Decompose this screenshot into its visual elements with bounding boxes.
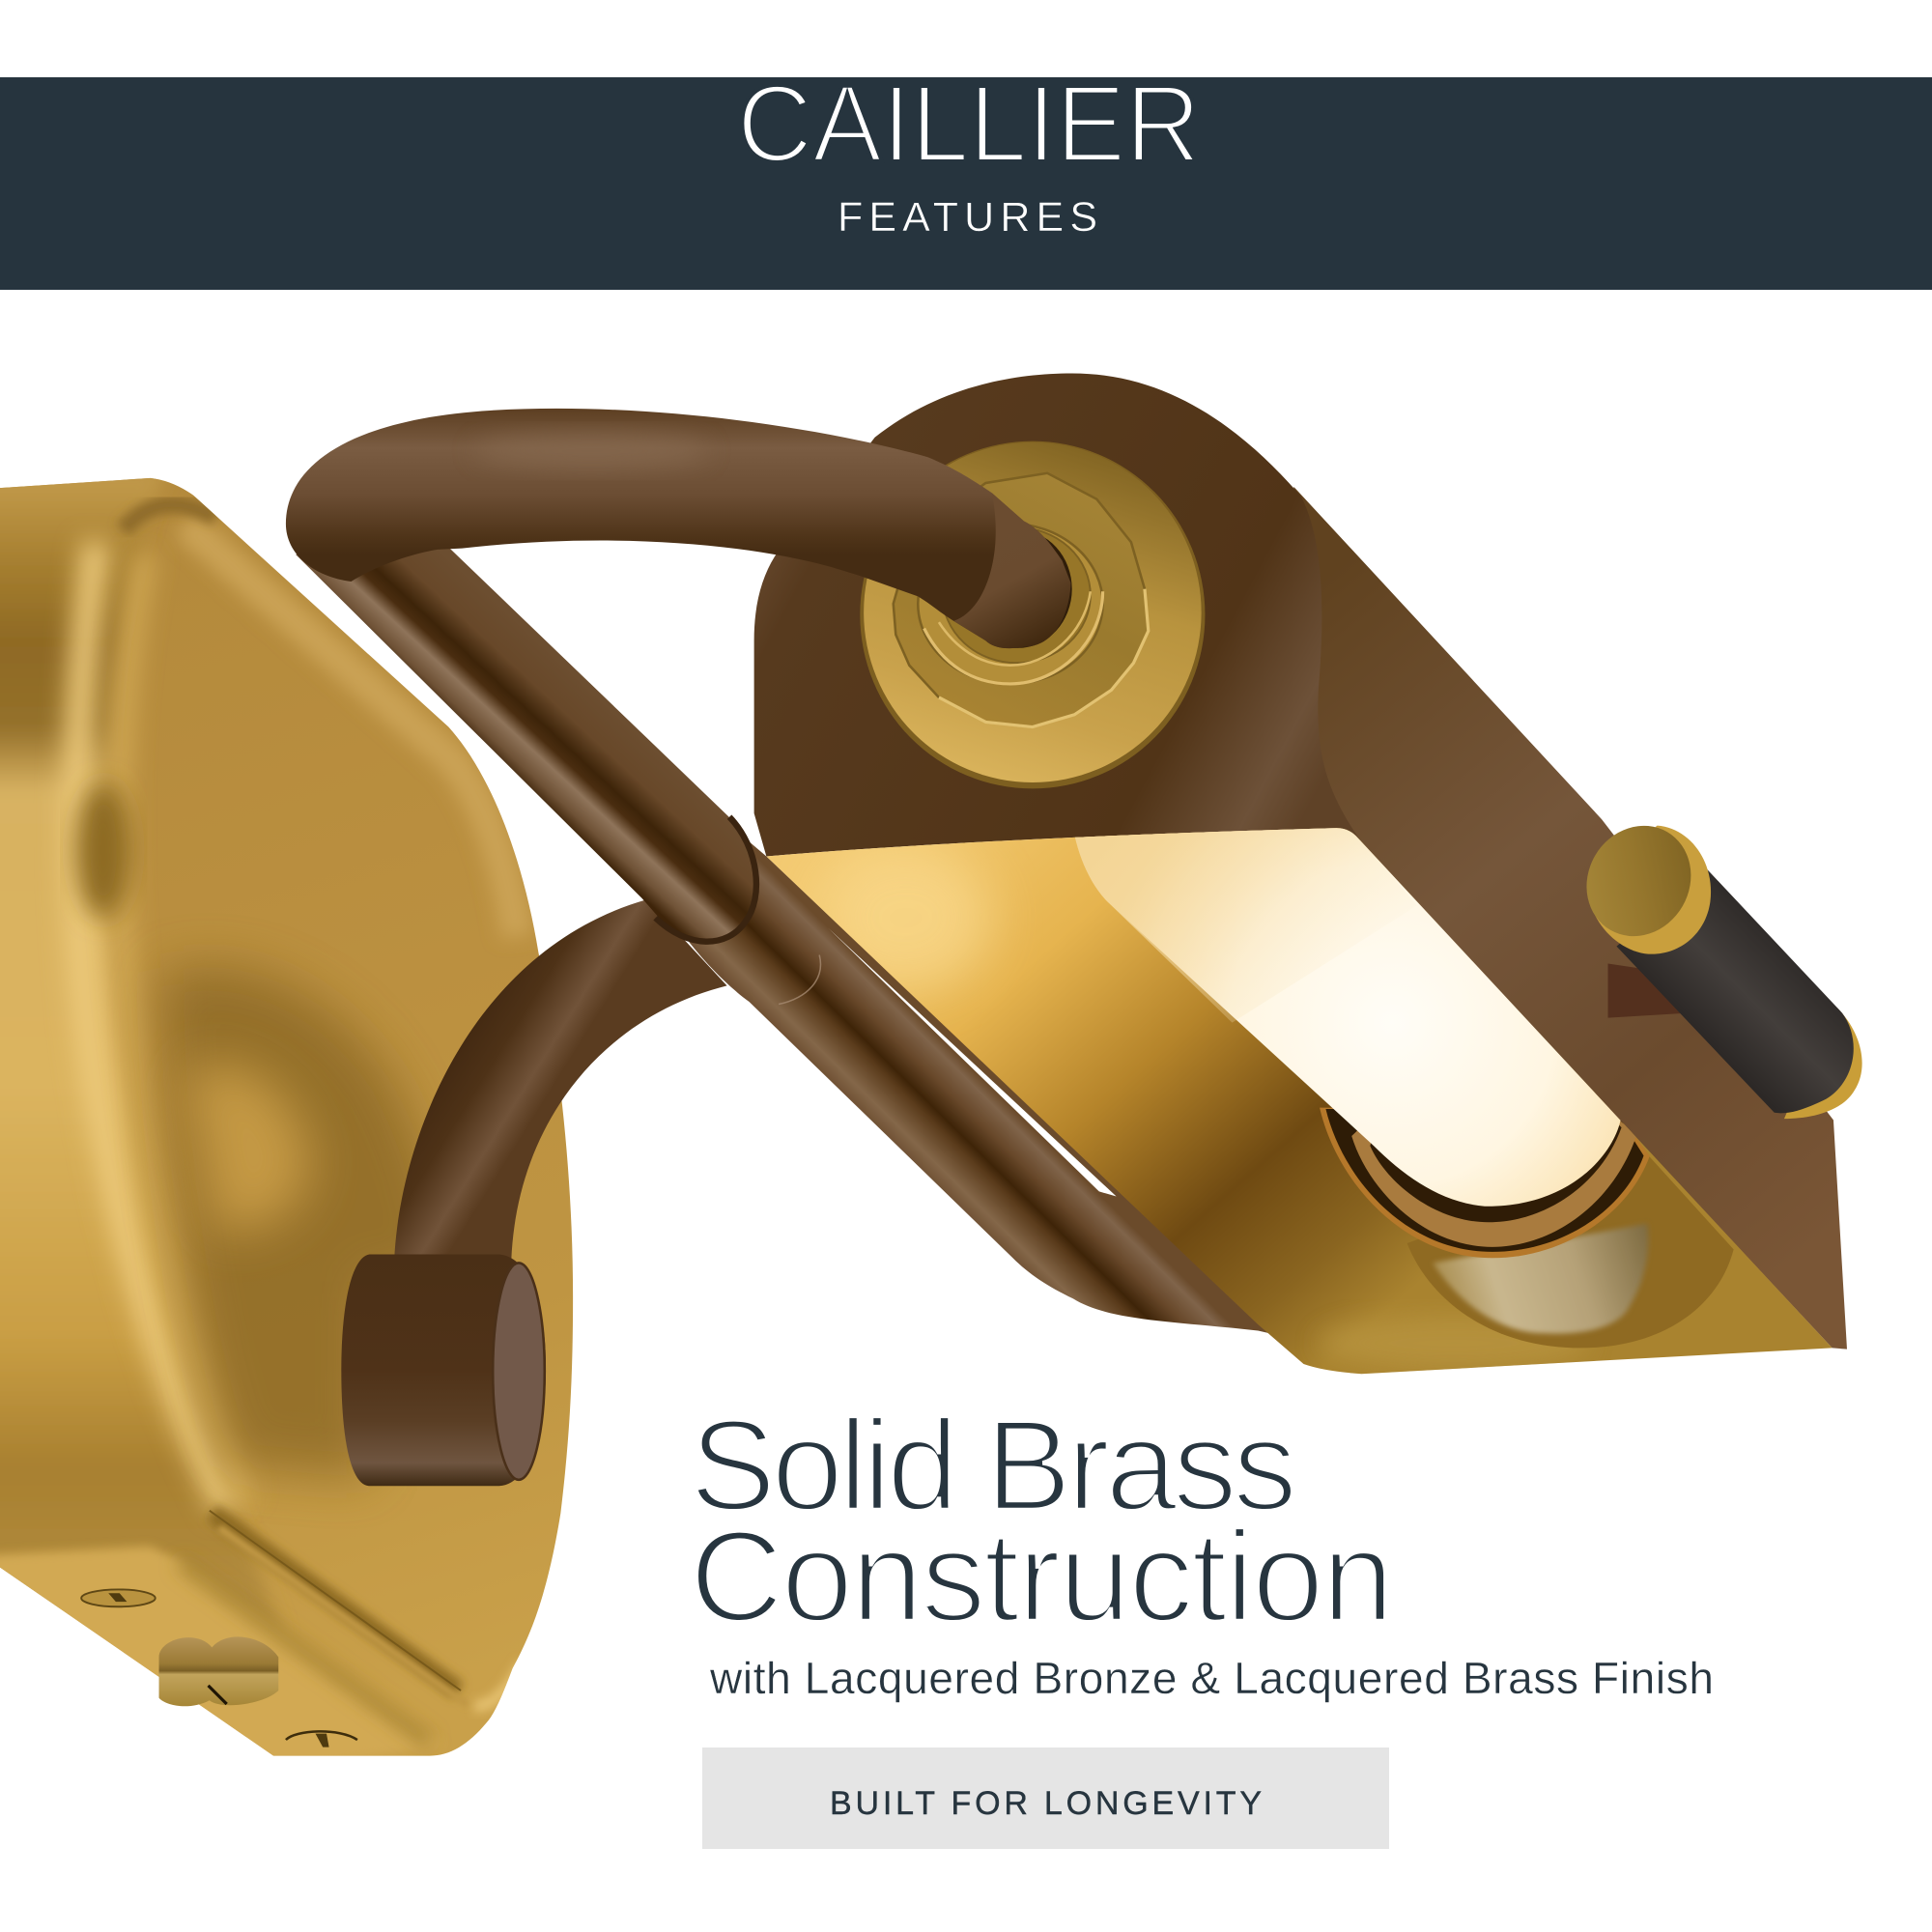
inner sleeve bbox=[1407, 1155, 1734, 1348]
callout tag: BUILT FOR LONGEVITY bbox=[830, 1785, 1262, 1822]
white gap between tube and shade bbox=[828, 927, 1117, 1197]
socket ring bbox=[1320, 1108, 1650, 1258]
mounting cylinder bbox=[341, 1254, 546, 1486]
sub-heading: with Lacquered Bronze & Lacquered Brass Finish bbox=[709, 1653, 1714, 1703]
shade side surface bbox=[1293, 487, 1847, 1350]
headline bbox=[690, 1394, 1394, 1649]
tube section below collar bbox=[671, 807, 1269, 1333]
tube collar ring bbox=[656, 817, 756, 942]
shade end panel bbox=[754, 373, 1360, 856]
lower curved arm bbox=[394, 899, 727, 1260]
shade opening bbox=[766, 826, 1833, 1374]
tube neck at joint bbox=[953, 493, 1070, 648]
top screw bbox=[81, 1589, 156, 1606]
title: CAILLIER: CAILLIER bbox=[737, 63, 1201, 185]
subtitle: FEATURES: FEATURES bbox=[838, 194, 1097, 241]
brass end tip bbox=[1784, 1005, 1862, 1119]
bronze bent tube: diagonal section bbox=[296, 542, 1269, 1333]
brass rosette and nut bbox=[860, 441, 1205, 788]
wall sconce product illustration bbox=[0, 373, 1862, 1775]
header band bbox=[0, 63, 1932, 290]
set screw knob bbox=[159, 1636, 278, 1706]
tube section above collar bbox=[296, 542, 757, 939]
brass cap bbox=[1567, 807, 1711, 955]
headline line one: Solid Brass bbox=[690, 1394, 1297, 1538]
pin stem bbox=[1608, 963, 1690, 1018]
headline line two: Construction bbox=[690, 1505, 1394, 1649]
leather grip bbox=[1616, 868, 1854, 1113]
frosted bulb bbox=[1073, 826, 1622, 1207]
light reflection on arc bbox=[474, 433, 708, 469]
shade pin and leather grip bbox=[1567, 807, 1862, 1119]
shade bbox=[754, 373, 1847, 1374]
bronze bent tube: upper arc bbox=[286, 409, 1070, 648]
bottom screw bbox=[286, 1731, 357, 1747]
brass backplate bbox=[0, 469, 573, 1775]
callout tag bbox=[702, 1747, 1389, 1849]
